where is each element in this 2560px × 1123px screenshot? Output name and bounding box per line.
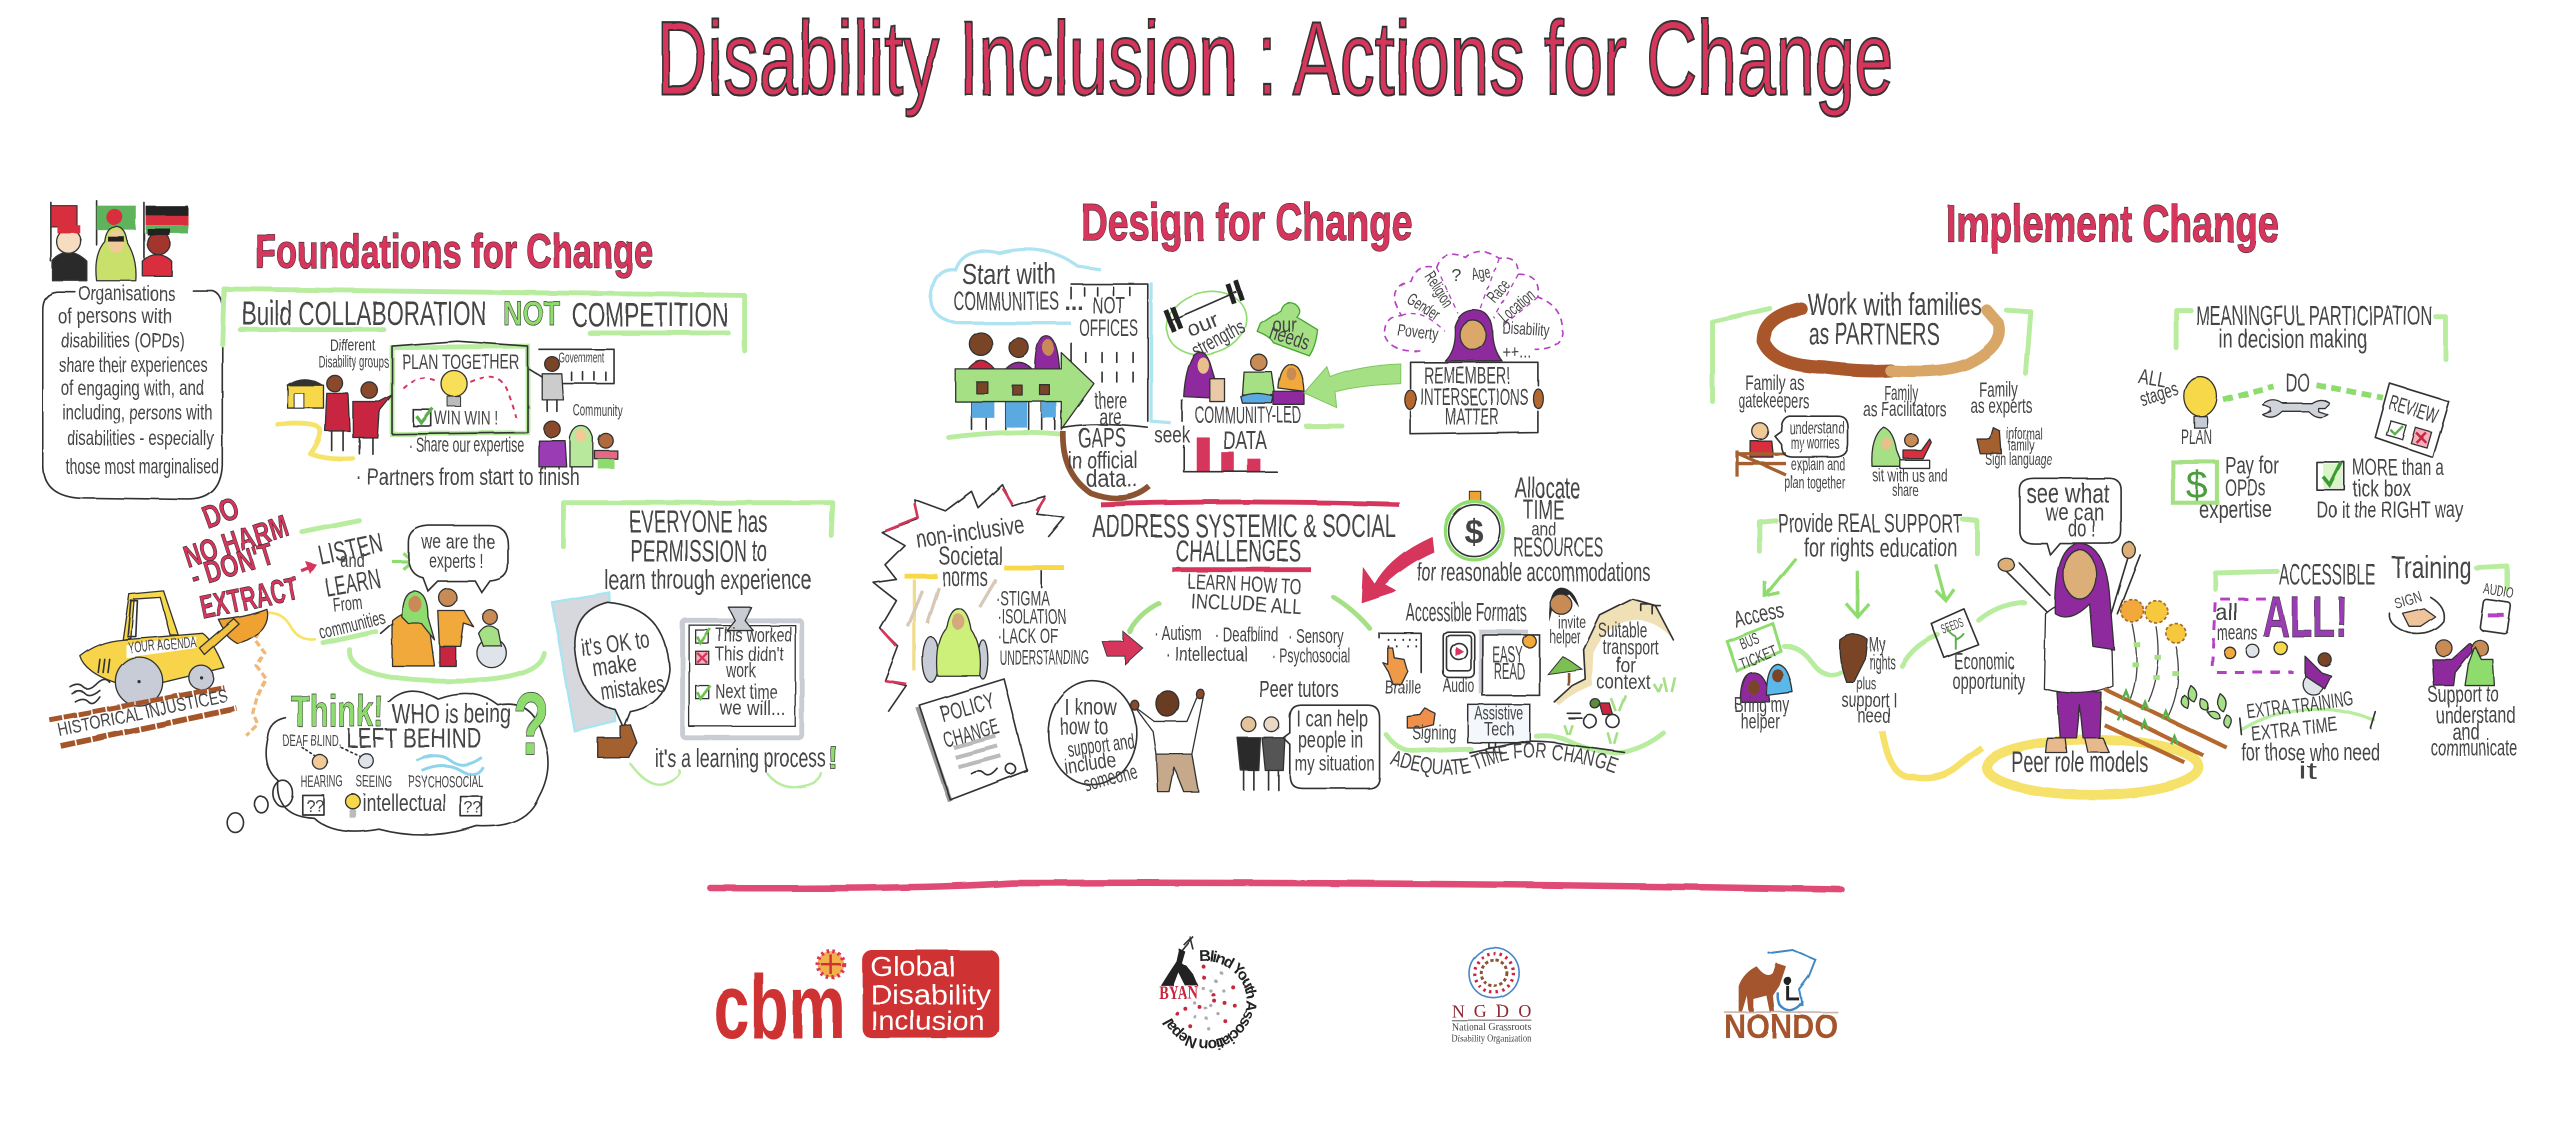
community label and people	[539, 402, 623, 468]
section: start with communities not offices: COMMUNITIES	[954, 286, 1060, 316]
plan do review path: stages	[2137, 378, 2181, 412]
bubble and man: I know how to support: I know	[1065, 694, 1117, 720]
panel: design for change	[872, 194, 1676, 802]
family as gatekeepers: gatekeepers	[1739, 390, 1809, 413]
label and bar chart: community-led data: DATA	[1223, 425, 1267, 455]
access bus ticket and helper	[1727, 596, 1793, 733]
text: listen and learn from communities: LEARN	[323, 563, 383, 603]
heading: design: Design for Change	[1081, 194, 1412, 252]
dashed cloud of identities: Disability	[1502, 317, 1550, 340]
my rights plus support: need	[1858, 705, 1890, 728]
logo: NONDO: NONDO	[1724, 1008, 1838, 1046]
section: address systemic and social challenges: INCLUDE ALL	[1190, 590, 1302, 619]
icon: our strengths barbell: strengths	[1188, 316, 1249, 363]
sign: remember intersections matter: REMEMBER!	[1424, 363, 1510, 390]
extra training extra time	[2240, 688, 2380, 785]
dashed cloud of identities: Race	[1483, 275, 1514, 307]
arrow: green intersections arrow	[1304, 364, 1401, 408]
illustration: peer role model woman with yellow ring	[1882, 542, 2199, 795]
section: start with communities not offices: there	[1094, 387, 1127, 413]
icon: braille	[1380, 633, 1421, 699]
logo: cbm global disability inclusion: Global	[870, 951, 955, 982]
section: provide real support for rights education: Provide REAL SUPPORT	[1778, 508, 1962, 538]
all means all: means	[2217, 622, 2258, 645]
icon: our needs puzzle piece: our	[1272, 313, 1296, 336]
clipboard: lessons learned: This worked	[715, 624, 792, 646]
thought cloud: think who is being left behind: DEAF BLIND,	[283, 733, 341, 750]
family as gatekeepers: explain and	[1791, 454, 1845, 474]
label and bar chart: community-led data: COMMUNITY-LED	[1195, 403, 1301, 429]
document: policy change: CHANGE	[940, 713, 1002, 753]
family as facilitators: Family	[1884, 382, 1918, 405]
icon: government man and chart: Government	[559, 350, 604, 366]
illustration: book with it's ok to make mistakes: mistakes	[599, 670, 666, 706]
family as gatekeepers: understand	[1789, 418, 1845, 438]
all means all: all	[2215, 599, 2238, 626]
sign: remember intersections matter	[1405, 362, 1543, 434]
section: address systemic and social challenges: · Deafblind	[1215, 624, 1278, 646]
section: everyone has permission to learn: PERMISSION to	[630, 533, 767, 568]
all means all: ALL!	[2263, 586, 2348, 650]
family as gatekeepers	[1737, 372, 1848, 492]
icon: invite helper: helper	[1549, 626, 1581, 648]
sign and audio support: and	[2452, 718, 2480, 744]
pay for OPDs expertise: Pay for	[2225, 452, 2279, 479]
section: address systemic and social challenges: · Sensory	[1288, 626, 1344, 648]
icon: assistive tech: Assistive	[1474, 702, 1523, 724]
my rights plus support: plus	[1856, 673, 1876, 693]
seeds economic opportunity: Economic	[1954, 648, 2015, 674]
illustration: suitable transport for context hill	[1548, 599, 1675, 744]
section: meaningful participation	[2137, 300, 2464, 523]
bubble and man: I know how to support: include	[1063, 749, 1118, 779]
text: it's a learning process	[630, 739, 839, 787]
callout: organisations of persons with disabilities: Organisations	[79, 282, 175, 305]
family as experts: as experts	[1970, 395, 2032, 418]
section: allocate time and resources: TIME	[1523, 494, 1564, 525]
section: accessible training: Training	[2392, 550, 2472, 585]
more than a tick box: tick box	[2352, 475, 2412, 501]
logo: NGDO national grassroots disability organization	[1451, 948, 1532, 1044]
plan do review path: REVIEW	[2386, 392, 2440, 428]
extra training extra time: EXTRA TIME	[2250, 713, 2339, 746]
illustration: book with it's ok to make mistakes: it's OK to	[580, 626, 651, 662]
section: address systemic and social challenges: ADDRESS SYSTEMIC & SOCIAL	[1092, 507, 1396, 544]
family as experts: Sign language	[1985, 449, 2052, 469]
callout: do no harm don't extract: DO	[198, 490, 244, 535]
pay for OPDs expertise: $	[2186, 464, 2208, 507]
bullet: partners from start to finish: · Partners from start to finish	[356, 464, 580, 491]
text: listen and learn from communities: From	[332, 592, 363, 617]
logo: NGDO national grassroots disability organization: National Grassroots	[1451, 1022, 1531, 1033]
icon: braille: Braille	[1384, 677, 1421, 699]
family as gatekeepers: Family as	[1745, 372, 1804, 395]
access bus ticket and helper: TICKET	[1737, 642, 1780, 673]
callout: organisations of persons with disabilities: disabilities (OPDs)	[61, 330, 185, 353]
clipboard: lessons learned: work	[726, 660, 757, 682]
pit: gaps in official data: data..	[1086, 465, 1138, 492]
speech bubble: see what we can do	[2019, 478, 2121, 555]
pay for OPDs expertise	[2173, 452, 2279, 523]
sign: remember intersections matter: MATTER	[1445, 403, 1499, 430]
speech bubble: we are the experts	[392, 526, 508, 593]
plan together board	[392, 341, 528, 434]
section: non-inclusive societal norms: ·LACK OF	[998, 625, 1058, 648]
text: listen and learn from communities	[302, 521, 387, 644]
illustration: book with it's ok to make mistakes	[552, 593, 670, 757]
bubble and man: I know how to support	[1048, 681, 1204, 797]
family as gatekeepers: plan together	[1784, 472, 1845, 492]
callout: organisations of persons with disabilities: including, persons with	[62, 401, 212, 424]
section: everyone has permission to learn	[552, 503, 839, 787]
family as experts: informal	[2006, 425, 2042, 443]
dashed cloud of identities: Poverty	[1397, 320, 1440, 344]
family as experts: family	[2008, 437, 2035, 455]
dashed cloud of identities: Religion	[1420, 267, 1458, 311]
section: non-inclusive societal norms	[874, 485, 1089, 712]
different disability groups label: Different	[330, 337, 376, 355]
section: allocate time and resources: and	[1531, 518, 1556, 540]
different disability groups label: Disability groups	[319, 353, 389, 371]
speech bubble: see what we can do: do !	[2068, 516, 2096, 543]
illustration: woman with purple scarf	[1445, 310, 1502, 361]
section: build collaboration not competition	[222, 289, 745, 491]
extra training extra time: EXTRA TRAINING	[2245, 688, 2355, 723]
icon: our needs puzzle piece: needs	[1267, 320, 1312, 355]
family as facilitators: as Facilitators	[1863, 398, 1946, 421]
pay for OPDs expertise: OPDs	[2225, 475, 2266, 502]
panel: foundations for change	[43, 201, 839, 835]
thought cloud: think who is being left behind: HEARING	[301, 773, 343, 791]
my rights plus support: support I	[1842, 689, 1897, 712]
section: provide real support for rights education: for rights education	[1804, 533, 1957, 563]
text: listen and learn from communities: LISTEN	[315, 527, 386, 571]
icon: our needs puzzle piece	[1257, 302, 1318, 356]
illustration: bulldozer your agenda: YOUR AGENDA	[127, 634, 198, 657]
section: work with families as partners: as PARTNERS	[1809, 316, 1939, 351]
plan together board: PLAN TOGETHER	[402, 351, 519, 374]
my rights plus support: rights	[1869, 652, 1895, 674]
thought cloud: think who is being left behind: intellectual	[363, 790, 446, 817]
illustration: suitable transport for context hill: transport	[1603, 637, 1659, 660]
clipboard: lessons learned: Next time	[715, 682, 777, 704]
plan together board: WIN WIN !	[434, 407, 498, 429]
section: build collaboration not competition: Build COLLABORATION	[242, 295, 487, 333]
bullet: share our expertise: · Share our expertise	[408, 434, 524, 457]
pit: gaps in official data: in official	[1068, 447, 1138, 474]
green arrows	[1765, 558, 1954, 617]
panel: design for change: UNDERSTANDING	[999, 646, 1089, 669]
icon: assistive tech	[1468, 702, 1530, 752]
dashed cloud of identities: Gender	[1403, 288, 1444, 324]
sign: remember intersections matter: INTERSECTIONS	[1420, 384, 1528, 411]
access bus ticket and helper: helper	[1740, 710, 1779, 733]
seeds economic opportunity: SEEDS	[1939, 615, 1966, 637]
plan do review path	[2137, 365, 2449, 457]
clipboard: lessons learned	[683, 607, 802, 738]
icon: government man and chart	[529, 349, 614, 411]
plan do review path: ALL	[2137, 365, 2168, 393]
section: non-inclusive societal norms: ·STIGMA	[996, 588, 1050, 611]
section: address systemic and social challenges: · Autism	[1154, 623, 1202, 645]
speech bubble: see what we can do: we can	[2045, 500, 2104, 527]
icon: our strengths barbell: our	[1183, 308, 1222, 342]
seeds economic opportunity	[1931, 602, 2025, 694]
illustration: woman in wheelchair	[923, 609, 988, 682]
text: it's a learning process: it's a learning process	[655, 743, 826, 773]
text: adequate time for change with green curve: ADEQUATE TIME FOR CHANGE	[1390, 742, 1619, 778]
logo: NGDO national grassroots disability organization: N G D O	[1451, 1001, 1531, 1021]
sign and audio support: understand	[2436, 702, 2516, 728]
text: adequate time for change with green curve	[1380, 692, 1666, 778]
icon: easy read	[1481, 632, 1540, 695]
section: everyone has permission to learn: learn through experience	[604, 564, 812, 595]
thought cloud: think who is being left behind: ??	[306, 797, 324, 815]
thought cloud: think who is being left behind: PSYCHOSOCIAL	[408, 773, 483, 791]
section: start with communities not offices: are	[1099, 403, 1122, 429]
callout: organisations of persons with disabilities: those most marginalised	[66, 455, 219, 478]
section: start with communities not offices: seek	[1154, 421, 1191, 447]
logo: cbm global disability inclusion: Disability	[870, 979, 991, 1010]
icon: three OPD representatives with flags	[51, 201, 188, 281]
family as facilitators: share	[1892, 480, 1918, 500]
clipboard: lessons learned: we will...	[719, 698, 785, 720]
callout: do no harm don't extract: - DON'T	[186, 536, 278, 594]
logo: NGDO national grassroots disability organization: Disability Organization	[1451, 1033, 1532, 1044]
section: address systemic and social challenges	[1092, 502, 1433, 668]
section: everyone has permission to learn: EVERYONE has	[629, 504, 767, 539]
more than a tick box: MORE than a	[2352, 454, 2444, 480]
thought cloud: think who is being left behind: LEFT BEHIND	[346, 723, 482, 754]
title: Disability Inclusion : Actions for Change	[656, 1, 1894, 118]
text: it's a learning process: !	[828, 739, 839, 776]
sign and audio support	[2390, 581, 2517, 761]
dashed cloud of identities: ++...	[1502, 341, 1531, 361]
family as experts	[1970, 379, 2052, 469]
callout: do no harm don't extract: NO HARM	[179, 508, 293, 575]
thought cloud: think who is being left behind: ??	[464, 799, 482, 817]
document: policy change	[918, 679, 1027, 801]
icon: invite helper	[1549, 588, 1586, 648]
icon: audio: Audio	[1443, 675, 1474, 697]
illustration: bulldozer your agenda: HISTORICAL INJUSTICES	[56, 684, 229, 740]
my rights plus support	[1784, 634, 1938, 728]
callout: organisations of persons with disabilities: of persons with	[57, 305, 172, 328]
section: start with communities not offices: OFFICES	[1079, 315, 1138, 342]
section: accessible formats: Accessible Formats	[1406, 597, 1526, 627]
section: accessible training: ACCESSIBLE	[2279, 558, 2375, 591]
peer tutors: I can help	[1296, 705, 1368, 731]
sign and audio support: AUDIO	[2482, 581, 2515, 603]
my rights plus support: My	[1869, 634, 1886, 656]
icon: easy read: EASY	[1492, 642, 1523, 668]
thought cloud: think who is being left behind: SEEING	[356, 773, 392, 791]
bubble and man: I know how to support: support and	[1066, 730, 1136, 762]
text: listen and learn from communities: communities	[317, 607, 387, 644]
dashed cloud of identities: ?	[1451, 265, 1461, 285]
section: start with communities not offices: NOT	[1092, 292, 1125, 319]
logo: blind youth association nepal: Blind Youth Association Nepal	[1162, 950, 1257, 1050]
family as facilitators: sit with us and	[1873, 466, 1948, 486]
section: accessible training	[2212, 550, 2517, 785]
section: allocate time and resources	[1417, 472, 1651, 587]
illustration: book with it's ok to make mistakes: make	[591, 649, 638, 682]
pay for OPDs expertise: expertise	[2199, 496, 2272, 523]
section: meaningful participation: in decision making	[2219, 324, 2367, 354]
heading: foundations: Foundations for Change	[255, 226, 653, 279]
section: address systemic and social challenges: CHALLENGES	[1176, 533, 1301, 568]
logo: cbm global disability inclusion	[714, 950, 999, 1058]
section: accessible formats	[1340, 548, 1676, 778]
thought cloud: think who is being left behind: Think!	[291, 687, 384, 736]
peer tutors: Peer tutors	[1259, 676, 1339, 703]
icon: assistive tech: Tech	[1484, 718, 1514, 740]
peer tutors: people in	[1298, 727, 1363, 753]
pit: gaps in official data	[1061, 422, 1149, 498]
section: address systemic and social challenges: · Intellectual	[1166, 644, 1247, 666]
logo: cbm global disability inclusion: Inclusion	[870, 1005, 985, 1036]
text: listen and learn from communities: and	[340, 549, 364, 571]
logo: cbm global disability inclusion: cbm	[714, 956, 846, 1058]
extra training extra time: for those who need	[2241, 740, 2380, 767]
access bus ticket and helper: Access	[1731, 596, 1786, 632]
section: community-led data	[1159, 281, 1401, 472]
extra training extra time: it	[2299, 758, 2317, 785]
sign and audio support: SIGN	[2392, 589, 2424, 613]
section: address systemic and social challenges: LEARN HOW TO	[1187, 570, 1302, 599]
icon: house and two people	[278, 375, 392, 459]
section: non-inclusive societal norms: Societal	[939, 541, 1003, 571]
section: provide real support for rights education	[1727, 508, 2025, 733]
all means all	[2212, 586, 2348, 695]
speech bubble: we are the experts: experts !	[430, 551, 483, 573]
icon: audio	[1443, 632, 1474, 697]
community label and people: Community	[573, 402, 623, 420]
illustration: suitable transport for context hill: Suitable	[1598, 620, 1647, 643]
callout: do no harm don't extract	[179, 490, 302, 625]
section: allocate time and resources: Allocate	[1515, 472, 1580, 505]
document: policy change: POLICY	[937, 687, 997, 727]
illustration: peer role model woman with yellow ring: Peer role models	[2011, 746, 2148, 779]
illustration: garden with flowers	[2104, 599, 2231, 762]
family as facilitators	[1863, 382, 1948, 500]
icon: signing: Signing	[1412, 722, 1456, 744]
icon: easy read: READ	[1494, 658, 1525, 684]
illustration: suitable transport for context hill: for	[1616, 654, 1636, 677]
thought cloud: think who is being left behind: ?	[513, 674, 549, 773]
illustration: bulldozer your agenda	[49, 591, 315, 746]
section: work with families as partners	[1713, 287, 2052, 500]
illustration: woman with clipboard and seated people	[1184, 352, 1304, 405]
thought cloud: think who is being left behind	[227, 674, 549, 835]
bubble and man: I know how to support: how to	[1060, 714, 1109, 740]
speech bubble: see what we can do: see what	[2026, 478, 2109, 509]
section: build collaboration not competition: COMPETITION	[572, 296, 728, 334]
callout: organisations of persons with disabilities: share their experiences	[59, 354, 208, 377]
seeds economic opportunity: opportunity	[1952, 668, 2025, 694]
section: non-inclusive societal norms: norms	[942, 562, 988, 592]
logo: NONDO	[1724, 950, 1838, 1046]
section: remember intersections matter	[1384, 251, 1562, 434]
more than a tick box	[2316, 454, 2464, 522]
bubble and man: I know how to support: someone	[1082, 760, 1140, 797]
different disability groups label	[319, 337, 389, 371]
access bus ticket and helper: Bring my	[1734, 694, 1790, 717]
icon: invite helper: invite	[1557, 612, 1586, 632]
section: start with communities not offices	[931, 249, 1191, 498]
divider line	[710, 883, 1842, 890]
label and bar chart: community-led data	[1182, 400, 1342, 472]
callout: organisations of persons with disabilities: of engaging with, and	[61, 377, 204, 400]
pit: gaps in official data: GAPS	[1078, 422, 1127, 453]
section: start with communities not offices: ...	[1065, 289, 1084, 315]
section: allocate time and resources: RESOURCES	[1513, 532, 1603, 563]
illustration: suitable transport for context hill: context	[1597, 671, 1651, 694]
section: allocate time and resources: $	[1464, 514, 1484, 552]
section: address systemic and social challenges: · Psychosocial	[1272, 646, 1350, 668]
speech bubble: we are the experts: we are the	[421, 531, 495, 553]
panel: implement change	[1713, 196, 2517, 795]
section: non-inclusive societal norms: non-inclusive	[914, 512, 1026, 554]
access bus ticket and helper: BUS	[1737, 629, 1762, 654]
plan do review path: PLAN	[2181, 426, 2212, 449]
dashed cloud of identities: Location	[1495, 285, 1539, 326]
icon: our strengths barbell	[1159, 281, 1254, 364]
peer tutors: my situation	[1295, 752, 1375, 775]
clipboard: lessons learned: This didn't	[715, 644, 784, 666]
sign and audio support: Support to	[2427, 681, 2499, 707]
section: work with families as partners: Work with families	[1807, 287, 1982, 322]
icon: signing	[1407, 708, 1456, 744]
dashed cloud of identities	[1384, 251, 1562, 361]
section: non-inclusive societal norms: ·ISOLATION	[998, 606, 1066, 629]
section: start with communities not offices: Start with	[962, 258, 1056, 291]
heading: implement: Implement Change	[1946, 196, 2279, 254]
logo: blind youth association nepal: BYAN	[1159, 983, 1199, 1004]
callout: organisations of persons with disabilities: disabilities - especially	[67, 428, 214, 451]
illustration: community group with wheelchair user	[349, 588, 544, 681]
family as gatekeepers: my worries	[1791, 433, 1840, 453]
dashed cloud of identities: Age	[1471, 262, 1492, 284]
section: allocate time and resources: for reasonable accommodations	[1417, 557, 1651, 587]
plan do review path: DO	[2285, 368, 2310, 398]
peer tutors	[1238, 676, 1380, 790]
section: build collaboration not competition: NOT	[503, 295, 560, 333]
callout: organisations of persons with disabilities	[43, 282, 222, 499]
family as experts: Family	[1979, 379, 2018, 402]
more than a tick box: Do it the RIGHT way	[2316, 496, 2464, 522]
illustration: three people carrying green arrow	[949, 333, 1094, 437]
callout: do no harm don't extract: EXTRACT	[197, 569, 302, 625]
thought cloud: think who is being left behind: WHO is being	[392, 698, 511, 729]
